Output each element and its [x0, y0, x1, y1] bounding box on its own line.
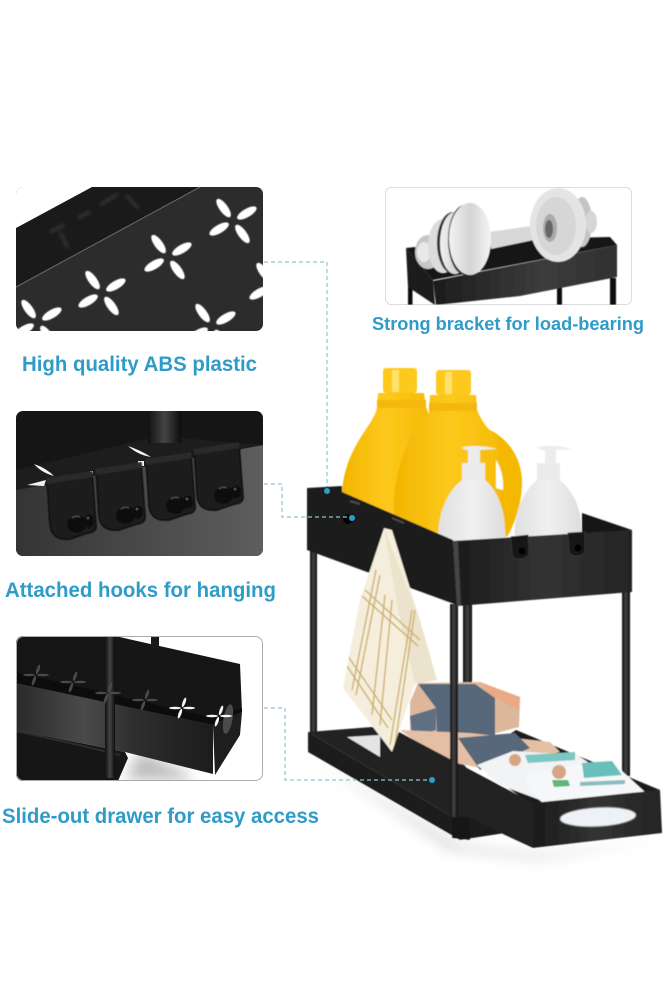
back rack legs: [310, 548, 630, 776]
floor shadow: [310, 755, 660, 860]
yellow bottle left: [342, 368, 429, 530]
panel border: [385, 187, 632, 305]
post: [105, 636, 115, 778]
pillar: [148, 411, 181, 443]
inner rim: [16, 672, 242, 725]
tray legs: [408, 278, 616, 306]
connector: drawer to rack: [264, 708, 435, 783]
end handle hole: [222, 704, 234, 734]
upper tray front face: [453, 530, 632, 606]
lower tray top surface: [308, 727, 510, 820]
back post: [151, 637, 159, 646]
panel: high quality ABS plastic detail: [16, 187, 263, 331]
panel: slide-out drawer detail: [16, 636, 263, 781]
upper dark inner wall: [16, 187, 200, 287]
hanging towel: [340, 525, 440, 755]
tray front face: [433, 245, 617, 305]
white pump bottle left: [438, 446, 506, 541]
product: two-tier rack: [307, 368, 662, 860]
lower tray base: [308, 732, 505, 840]
front left leg: [450, 604, 458, 818]
connector: ABS plastic to top tray: [264, 262, 327, 490]
white cut-outs: [27, 446, 191, 486]
tray outer wall: [16, 445, 263, 556]
base foot: [452, 817, 470, 840]
drawer side: [380, 722, 533, 848]
four hooks: [46, 442, 243, 539]
drawer front face: [16, 683, 213, 774]
perforations, dark: [23, 664, 158, 711]
panel: strong bracket with dumbbell: [385, 187, 632, 306]
connector: hooks to rack: [264, 484, 355, 521]
faint cross marks: [50, 194, 138, 248]
heading: ABS plastic: High quality ABS plastic: [22, 352, 257, 376]
dumbbell: [415, 188, 597, 275]
upper tray left face: [307, 486, 457, 605]
white pump bottle right: [515, 446, 582, 537]
wipes packs: [477, 751, 645, 803]
heading: strong bracket: Strong bracket for load-bearing: [372, 313, 644, 334]
lower base: [16, 730, 128, 781]
cross cut-outs: [18, 198, 263, 331]
tissue boxes: [400, 682, 560, 770]
upper tray hooks: [343, 501, 585, 559]
tray back interior: [406, 237, 617, 280]
heading: drawer: Slide-out drawer for easy access: [2, 804, 319, 828]
drawer front: [533, 790, 662, 848]
panel: attached hooks: [16, 411, 263, 556]
white corner: [16, 187, 92, 228]
dot: hooks: [349, 515, 355, 521]
edge highlight: [16, 187, 200, 287]
drawer interior top: [16, 636, 242, 725]
heading: hooks: Attached hooks for hanging: [5, 578, 276, 602]
inner floor: [144, 445, 262, 467]
drawer handle: [560, 806, 636, 828]
drawer end face: [213, 712, 242, 775]
panel border: [16, 636, 262, 780]
shadow below drawer: [125, 750, 190, 781]
drawer interior: [470, 730, 660, 806]
perforations, white: [169, 697, 232, 727]
upper tray interior: [582, 513, 632, 534]
handle gap: [496, 460, 503, 490]
tray left face: [406, 248, 435, 305]
dot: top tray: [324, 488, 330, 494]
dot: drawer: [429, 777, 435, 783]
yellow bottle right: [394, 370, 522, 540]
